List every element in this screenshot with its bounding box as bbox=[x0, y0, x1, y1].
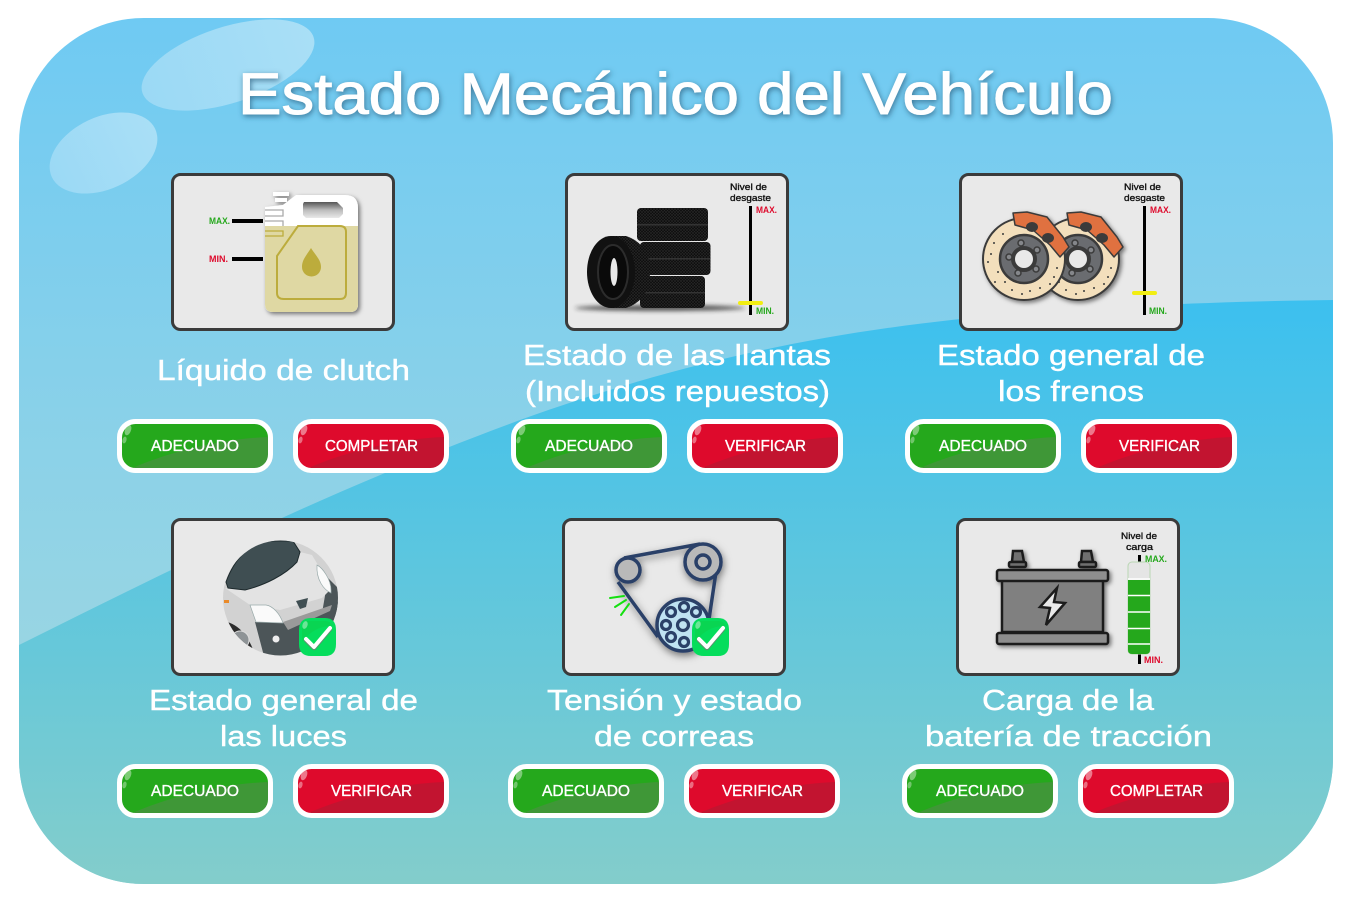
label bbox=[547, 685, 802, 753]
button: adecuado bbox=[510, 766, 662, 816]
button: adecuado: ADECUADO bbox=[151, 438, 239, 455]
card image: battery and charge level: carga bbox=[1126, 542, 1154, 553]
button: verificar: VERIFICAR bbox=[1119, 438, 1200, 455]
card image: car front with check bbox=[172, 520, 394, 674]
button: adecuado bbox=[904, 766, 1056, 816]
card image: brake discs: MIN. bbox=[1149, 306, 1167, 317]
label: Estado de las llantas bbox=[523, 340, 831, 372]
button: adecuado bbox=[120, 422, 270, 470]
button: adecuado bbox=[120, 766, 270, 816]
card image: battery and charge level bbox=[958, 520, 1178, 674]
card image: brake discs: MAX. bbox=[1150, 205, 1171, 216]
card image: tires: MIN. bbox=[756, 306, 774, 317]
panel: carga de la bateria de traccion bbox=[904, 520, 1232, 816]
panel: estado general de las luces bbox=[120, 520, 446, 816]
card image: brake discs: Nivel de bbox=[1124, 182, 1161, 193]
label: Estado general de bbox=[937, 340, 1205, 372]
card image: battery and charge level: MAX. bbox=[1145, 554, 1167, 565]
card image: battery and charge level: MIN. bbox=[1144, 655, 1163, 666]
label: Carga de la bbox=[982, 685, 1155, 717]
label: Tensión y estado bbox=[547, 685, 802, 717]
label bbox=[523, 340, 831, 408]
label: Líquido de clutch bbox=[157, 355, 410, 387]
button: adecuado: ADECUADO bbox=[151, 783, 239, 800]
title: Estado Mecánico del Vehículo bbox=[238, 62, 1113, 127]
card image: belt and pulleys with check bbox=[564, 520, 784, 674]
panel: tension y estado de correas bbox=[510, 520, 838, 816]
button: verificar: VERIFICAR bbox=[722, 783, 803, 800]
card image: tires bbox=[566, 174, 788, 330]
label: los frenos bbox=[998, 376, 1144, 408]
label: las luces bbox=[220, 721, 347, 753]
card image: brake discs: desgaste bbox=[1124, 193, 1165, 204]
button: adecuado: ADECUADO bbox=[545, 438, 633, 455]
button: verificar bbox=[686, 766, 838, 816]
panel: estado de las llantas bbox=[514, 174, 840, 470]
button: adecuado bbox=[908, 422, 1058, 470]
button: verificar: VERIFICAR bbox=[725, 438, 806, 455]
card image: tires: Nivel de bbox=[730, 182, 767, 193]
button: verificar: VERIFICAR bbox=[331, 783, 412, 800]
button: adecuado: ADECUADO bbox=[939, 438, 1027, 455]
card image: clutch fluid jug: MIN. bbox=[209, 254, 228, 265]
button: verificar bbox=[690, 422, 840, 470]
label: (Incluidos repuestos) bbox=[525, 376, 830, 408]
card image: brake discs bbox=[960, 174, 1182, 330]
card image: tires: desgaste bbox=[730, 193, 771, 204]
button: verificar bbox=[296, 766, 446, 816]
label bbox=[149, 685, 418, 753]
panel: liquido de clutch bbox=[120, 174, 446, 470]
label bbox=[937, 340, 1205, 408]
label bbox=[925, 685, 1212, 753]
button: adecuado: ADECUADO bbox=[936, 783, 1024, 800]
label: de correas bbox=[594, 721, 754, 753]
button: completar: COMPLETAR bbox=[325, 438, 418, 455]
button: adecuado: ADECUADO bbox=[542, 783, 630, 800]
button: completar: COMPLETAR bbox=[1110, 783, 1203, 800]
button: completar bbox=[1080, 766, 1232, 816]
button: adecuado bbox=[514, 422, 664, 470]
card image: clutch fluid jug bbox=[172, 174, 394, 330]
card image: battery and charge level: Nivel de bbox=[1121, 531, 1157, 542]
card image: clutch fluid jug: MAX. bbox=[209, 216, 230, 227]
label: Estado general de bbox=[149, 685, 418, 717]
label: batería de tracción bbox=[925, 721, 1212, 753]
button: verificar bbox=[1084, 422, 1234, 470]
panel: estado general de los frenos bbox=[908, 174, 1234, 470]
button: completar bbox=[296, 422, 446, 470]
card image: tires: MAX. bbox=[756, 205, 777, 216]
